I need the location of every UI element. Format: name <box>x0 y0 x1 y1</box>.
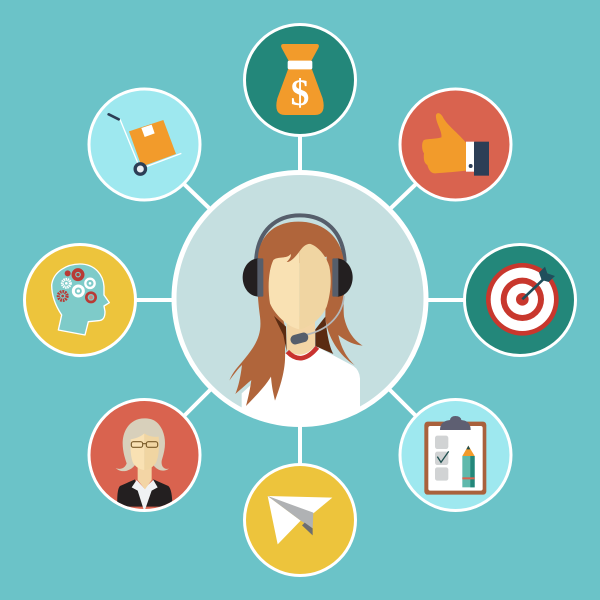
icon: trolley handle <box>109 114 119 119</box>
icon: jacket sleeve <box>474 142 489 176</box>
icon: head silhouette <box>52 264 109 335</box>
agent body <box>242 347 360 430</box>
left ear cup <box>243 258 263 297</box>
microphone arm <box>305 296 344 335</box>
icon: target rings <box>486 263 559 336</box>
icon: clipboard board <box>424 422 486 495</box>
icon: trolley frame <box>120 119 181 168</box>
icon: cuff button <box>469 164 473 168</box>
panel: target <box>464 244 576 356</box>
panel: hand truck <box>89 89 200 200</box>
icon: shirt cuff <box>466 142 475 172</box>
agent collar <box>287 347 317 358</box>
icon: clipboard paper <box>428 426 483 491</box>
icon: trolley wheel <box>135 164 145 174</box>
icon: box label <box>141 125 155 137</box>
woman hair <box>116 418 169 471</box>
agent hair <box>229 222 363 406</box>
agent headband <box>256 215 345 262</box>
icon: clipboard clip <box>440 416 471 430</box>
panel: checklist <box>400 400 511 510</box>
agent neck <box>287 317 315 355</box>
icon: pencil <box>462 446 475 487</box>
icon: gears <box>58 270 96 302</box>
woman neck <box>138 463 152 489</box>
icon: cardboard box <box>129 120 176 167</box>
icon: money bag <box>276 44 324 115</box>
panel: thumbs up <box>400 89 511 200</box>
woman jacket <box>117 479 172 510</box>
panel: central support agent <box>174 172 426 430</box>
microphone <box>289 331 309 345</box>
panel: money bag <box>244 24 356 136</box>
woman face <box>130 433 159 470</box>
agent hair behind neck <box>274 316 333 354</box>
icon: dart <box>522 267 555 299</box>
agent face <box>269 244 331 329</box>
woman shirt <box>132 480 158 512</box>
panel: brain gears <box>24 244 136 356</box>
panel: businesswoman <box>89 400 200 512</box>
right ear cup <box>332 258 353 297</box>
dollar sign: $ <box>291 73 309 114</box>
woman glasses <box>131 442 158 447</box>
icon: hand <box>422 113 466 173</box>
panel: paper plane <box>244 464 356 576</box>
icon: check mark <box>437 451 449 462</box>
icon: checkboxes <box>435 436 448 481</box>
icon: paper plane <box>268 496 332 544</box>
money bag tie <box>288 61 312 69</box>
